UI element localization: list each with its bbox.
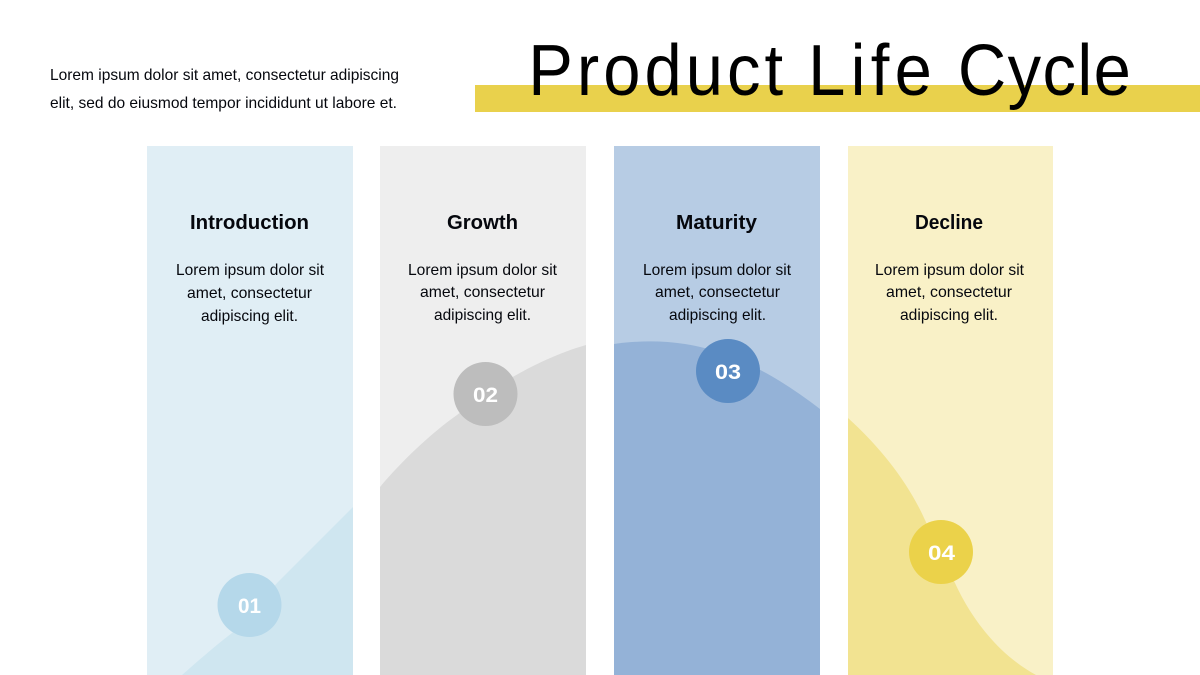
panel: decline: [848, 146, 1053, 675]
body text: growth: amet, consectetur: [420, 284, 546, 301]
heading: growth: Growth: [447, 212, 518, 234]
intro text: [50, 67, 399, 112]
body text: introduction: Lorem ipsum dolor sit: [176, 262, 325, 279]
body text: growth: Lorem ipsum dolor sit: [408, 262, 558, 279]
intro text: Lorem ipsum dolor sit amet, consectetur adipiscing: [50, 67, 399, 84]
panel background: decline: [848, 146, 1053, 675]
panel background: growth: [380, 146, 586, 675]
number badge: 04: [909, 520, 973, 584]
title: Product: [528, 30, 783, 111]
body text: maturity: adipiscing elit.: [669, 307, 766, 324]
title: [528, 30, 1131, 111]
body text: decline: Lorem ipsum dolor sit: [875, 262, 1025, 279]
number badge: 01: [218, 573, 282, 637]
panel: growth: [380, 146, 586, 675]
heading: decline: Decline: [915, 212, 983, 234]
body text: decline: adipiscing elit.: [900, 307, 998, 324]
number badge: 03: 03: [715, 361, 741, 384]
panel: maturity: [614, 146, 820, 675]
curve area: decline: [848, 418, 1036, 675]
curve area: introduction: [182, 507, 353, 675]
body text: decline: amet, consectetur: [886, 284, 1013, 301]
title accent bar: [475, 85, 1200, 112]
number badge: 04: 04: [928, 542, 955, 565]
heading: introduction: Introduction: [190, 212, 309, 234]
intro text: elit, sed do eiusmod tempor incididunt ut labore et.: [50, 95, 397, 112]
number badge: 02: 02: [473, 384, 498, 407]
panel background: introduction: [147, 146, 353, 675]
body text: introduction: amet, consectetur: [187, 285, 313, 302]
number badge: 03: [696, 339, 760, 403]
curve area: maturity: [614, 341, 820, 675]
panel: introduction: [147, 146, 353, 675]
body text: growth: [408, 262, 558, 324]
curve area: growth: [380, 345, 586, 675]
body text: introduction: adipiscing elit.: [201, 308, 298, 325]
body text: introduction: [176, 262, 325, 325]
body text: maturity: [643, 262, 792, 324]
body text: growth: adipiscing elit.: [434, 307, 531, 324]
title: Cycle: [958, 30, 1131, 111]
heading: maturity: Maturity: [676, 212, 758, 234]
number badge: 01: 01: [238, 595, 261, 618]
body text: decline: [875, 262, 1025, 324]
body text: maturity: amet, consectetur: [655, 284, 781, 301]
title: Life: [808, 30, 932, 111]
number badge: 02: [454, 362, 518, 426]
panel background: maturity: [614, 146, 820, 675]
body text: maturity: Lorem ipsum dolor sit: [643, 262, 792, 279]
